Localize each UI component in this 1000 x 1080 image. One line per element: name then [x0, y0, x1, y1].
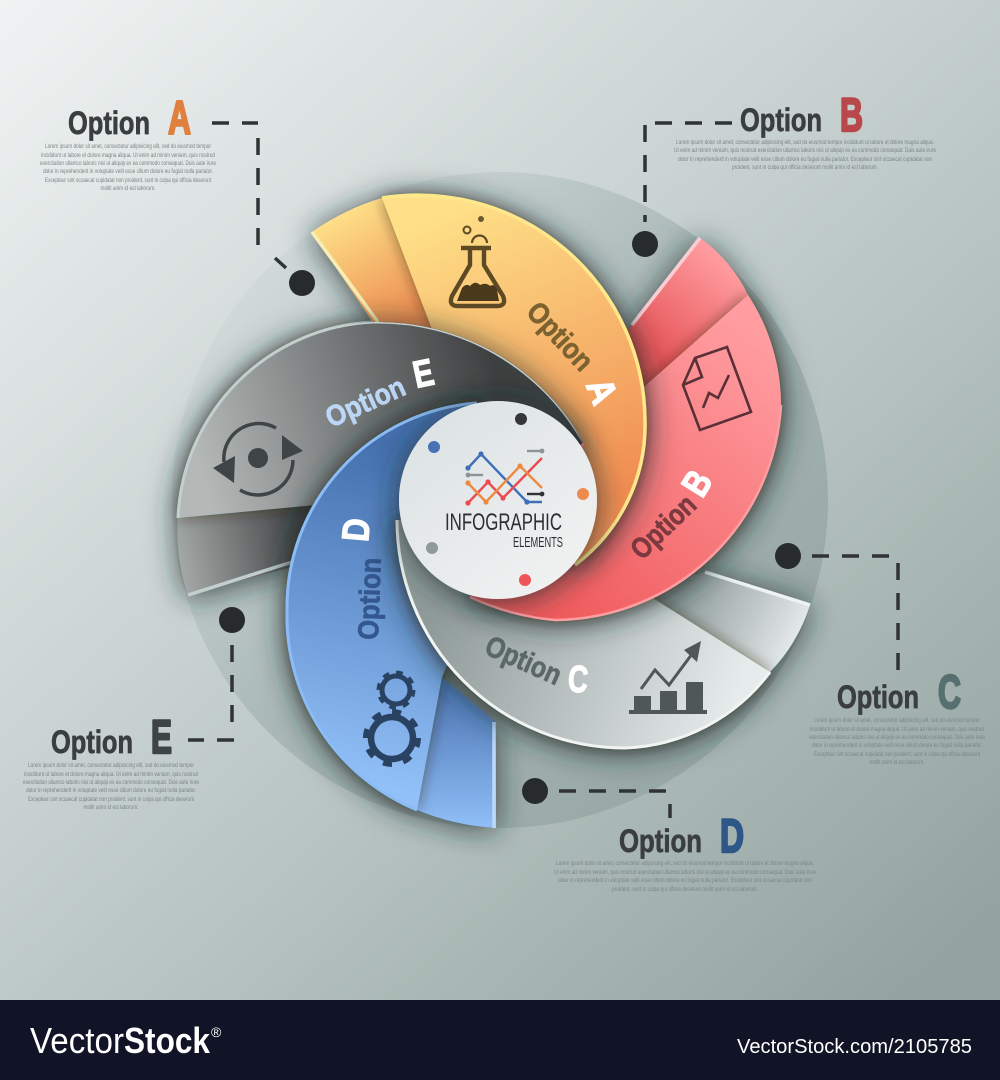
- callout A: dolor in reprehenderit in voluptate velit esse cillum dolore eu fugiat nulla pariator.: [43, 169, 213, 175]
- callout B: Lorem ipsum dolor sit amet, consectetur adipisicing elit, sed do eiusmod tempor incididunt ut labore et dolore magna aliqua.: [676, 140, 934, 146]
- callout A: Option: [68, 105, 150, 141]
- callout E: incididunt ut labore et dolore magna aliqua. Ut enim ad minim veniam, quis nostrud: [24, 772, 198, 778]
- callout E: mollit anim id est laborum.: [84, 805, 139, 811]
- segment C: [397, 520, 810, 748]
- callout B: dolor in reprehenderit in voluptate velit esse cillum dolore eu fugiat nulla pariator. Excepteur sint occaecat cupidatat non: [678, 157, 932, 163]
- label: Option A: Option: [520, 296, 599, 378]
- label: Option E: [321, 352, 438, 434]
- footer band: Stock: [124, 1020, 211, 1061]
- label: Option C: C: [566, 658, 590, 702]
- callout C: C: [938, 665, 961, 718]
- label: Option E: Option: [321, 371, 411, 434]
- callout C: [775, 543, 986, 766]
- footer band: ®: [211, 1024, 222, 1040]
- label: Option C: Option: [480, 630, 566, 692]
- callout C: Option: [837, 679, 919, 715]
- callout A: mollit anim id est laborum.: [100, 186, 156, 192]
- callout A: [40, 91, 315, 296]
- callout D: proident, sunt in culpa qui officia deserunt mollit anim id est laborum.: [612, 887, 758, 893]
- segment E: [178, 322, 585, 595]
- callout A: incididunt ut labore et dolore magna aliqua. Ut enim ad minim veniam, quis nostrud: [41, 153, 215, 159]
- callout D: [522, 778, 817, 893]
- callout A: exercitation ullamco laboris nisi ut aliquip ex ea commodo consequat. Duis aute irure: [40, 161, 217, 167]
- centre title: [445, 509, 563, 551]
- logo: crossing line chart: [465, 449, 544, 506]
- callout D: Lorem ipsum dolor sit amet, consectetur adipisicing elit, sed do eiusmod tempor incididunt ut labore et dolore magna aliqua.: [556, 861, 814, 867]
- label: Option B: Option: [625, 489, 703, 566]
- backing disc: [172, 172, 828, 828]
- icon: document with trend line: [683, 347, 751, 430]
- callout A: Lorem ipsum dolor sit amet, consectetur adipisicing elit, sed do eiusmod tempor: [45, 144, 211, 150]
- callout B: Option: [740, 102, 822, 138]
- label: Option D: [335, 517, 388, 640]
- callout B: B: [840, 88, 863, 141]
- footer band: [0, 1000, 1000, 1080]
- label: Option B: B: [674, 463, 721, 504]
- callout E: [23, 607, 245, 811]
- callout E: E: [151, 710, 172, 763]
- centre title: ELEMENTS: [513, 534, 563, 551]
- callout D: Option: [619, 823, 702, 859]
- segment B: [470, 238, 781, 620]
- callout A: Excepteur sint occaecat cupidatat non proident, sunt in culpa qui officia deserunt: [45, 178, 211, 184]
- callout C: mollit anim id est laborum.: [870, 760, 925, 766]
- footer band: Vector: [30, 1020, 124, 1061]
- callout E: Option: [51, 724, 133, 760]
- segment A: [178, 195, 645, 565]
- label: Option A: A: [577, 373, 625, 410]
- icon: gears: [366, 673, 418, 764]
- footer band: VectorStock.com/2105785: [737, 1036, 972, 1058]
- centre title: INFOGRAPHIC: [445, 509, 562, 536]
- callout D: Ut enim ad minim veniam, quis nostrud exercitation ullamco laboris nisi ut aliquip ex ea commodo consequat. Duis aute irure: [554, 870, 817, 876]
- callout D: dolor in reprehenderit in voluptate velit esse cillum dolore eu fugiat nulla pariator. Excepteur sint occaecat cupidatat non: [558, 878, 812, 884]
- callout B: Ut enim ad minim veniam, quis nostrud exercitation ullamco laboris nisi ut aliquip ex ea commodo consequat. Duis aute irure: [674, 148, 937, 154]
- centre marker dots: [426, 413, 589, 586]
- label: Option A: [520, 296, 625, 410]
- callout A: A: [168, 91, 191, 144]
- centre disc: [399, 401, 597, 599]
- callout E: Excepteur sint occaecat cupidatat non proident, sunt in culpa qui officia deserunt: [28, 797, 194, 803]
- label: Option D: Option: [353, 557, 388, 640]
- callout B: [632, 88, 937, 257]
- callout B: proident, sunt in culpa qui officia deserunt mollit anim id est laborum.: [732, 165, 878, 171]
- segment D: [287, 403, 520, 828]
- callout D: D: [720, 809, 744, 862]
- icon: flask: [451, 216, 504, 306]
- callout E: exercitation ullamco laboris nisi ut aliquip ex ea commodo consequat. Duis aute irure: [23, 780, 200, 786]
- callout E: Lorem ipsum dolor sit amet, consectetur adipisicing elit, sed do eiusmod tempor: [28, 763, 194, 769]
- label: Option E: E: [409, 352, 438, 397]
- label: Option D: D: [335, 517, 379, 543]
- icon: refresh arrows: [213, 423, 303, 495]
- icon: bar chart with arrow: [629, 641, 707, 714]
- callout E: dolor in reprehenderit in voluptate velit esse cillum dolore eu fugiat nulla pariator.: [26, 788, 196, 794]
